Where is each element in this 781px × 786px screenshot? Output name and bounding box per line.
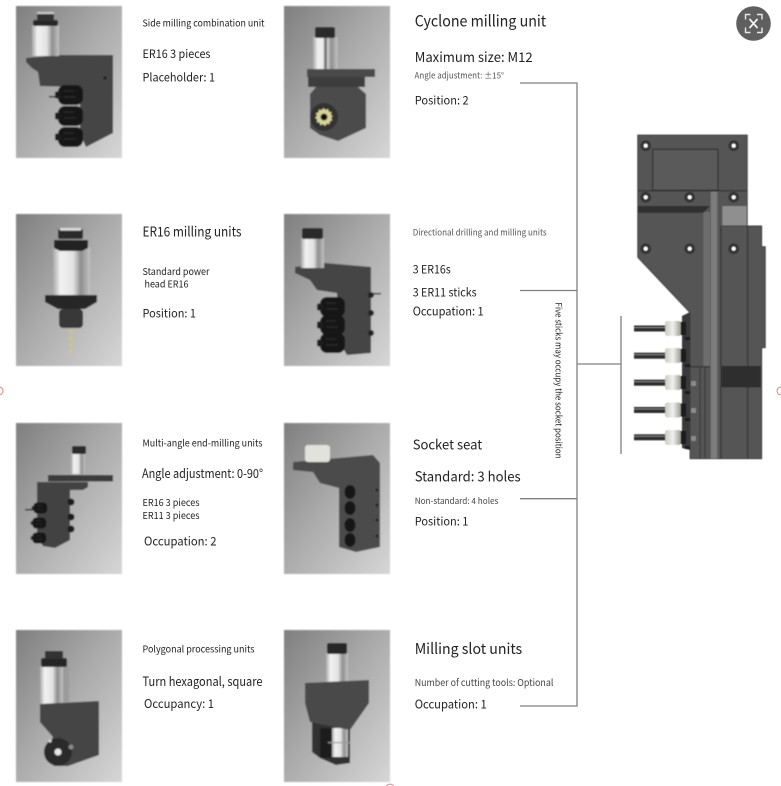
text block: ER16 milling units: head ER16 — [144, 276, 188, 290]
panel: socket seat photo — [284, 423, 390, 574]
text block: socket seat: Non-standard: 4 holes — [415, 495, 498, 507]
text block: multi-angle end-milling units: Multi-angle end-milling units — [142, 436, 263, 450]
text block: side milling combination unit: ER16 3 pieces — [142, 46, 210, 62]
mounting holes — [642, 142, 738, 252]
text block: side milling combination unit — [142, 16, 265, 86]
tool holder stack — [634, 312, 696, 450]
panel: multi-angle end-milling unit photo — [16, 423, 122, 574]
text block: milling slot units — [415, 638, 554, 713]
panel: directional drilling and milling unit photo — [284, 214, 390, 366]
text block: milling slot units: Number of cutting tools: Optional — [415, 675, 554, 689]
text block: socket seat: Standard: 3 holes — [415, 467, 521, 487]
text block: multi-angle end-milling units: ER16 3 pieces — [142, 495, 200, 509]
bracket connector lines — [520, 83, 621, 706]
text block: directional drilling and milling units: 3 ER11 sticks — [413, 285, 477, 301]
text block: ER16 milling units: Position: 1 — [142, 306, 196, 322]
text block: cyclone milling unit — [414, 10, 546, 108]
markers: red page edge circles — [0, 387, 781, 786]
text block: polygonal processing units: Turn hexagonal, square — [142, 671, 263, 690]
panel: polygonal processing unit photo — [16, 630, 122, 782]
text block: cyclone milling unit: Maximum size: M12 — [415, 46, 533, 66]
text block: multi-angle end-milling units: Occupation: 2 — [144, 533, 217, 550]
text block: polygonal processing units: Polygonal processing units — [142, 642, 255, 656]
text block: multi-angle end-milling units — [142, 436, 263, 550]
text block: socket seat — [413, 433, 521, 529]
text block: ER16 milling units: ER16 milling units — [142, 220, 242, 240]
panel: side milling combination unit photo — [16, 6, 122, 158]
text block: cyclone milling unit: Angle adjustment: ±15° — [414, 69, 504, 81]
text block: socket seat: Position: 1 — [415, 513, 468, 529]
text block: side milling combination unit: Placeholder: 1 — [142, 70, 215, 86]
icon: image search button — [736, 6, 771, 41]
panel: ER16 milling unit photo — [16, 214, 122, 366]
text block: socket seat: Socket seat — [413, 433, 482, 453]
text block: cyclone milling unit: Position: 2 — [415, 92, 469, 108]
text block: side milling combination unit: Side milling combination unit — [142, 16, 265, 30]
vertical note: Five sticks may occupy the socket position — [552, 302, 564, 458]
text block: directional drilling and milling units: Occupation: 1 — [413, 303, 484, 320]
text block: milling slot units: Occupation: 1 — [415, 696, 487, 713]
text block: polygonal processing units: Occupancy: 1 — [144, 695, 214, 712]
text block: polygonal processing units — [142, 642, 263, 712]
text block: ER16 milling units — [142, 220, 242, 322]
text block: directional drilling and milling units: 3 ER16s — [413, 261, 451, 277]
text block: ER16 milling units: Standard power — [142, 264, 210, 278]
text block: milling slot units: Milling slot units — [415, 638, 522, 659]
text block: cyclone milling unit: Cyclone milling unit — [415, 10, 546, 32]
panel: cyclone milling unit photo — [284, 6, 390, 158]
text block: multi-angle end-milling units: Angle adjustment: 0-90° — [142, 463, 263, 482]
text block: directional drilling and milling units — [413, 227, 547, 320]
technical drawing: side view of tool turret — [634, 135, 765, 459]
text block: multi-angle end-milling units: ER11 3 pieces — [142, 508, 200, 522]
text block: directional drilling and milling units: Directional drilling and milling units — [413, 227, 547, 239]
panel: milling slot unit photo — [284, 630, 390, 782]
